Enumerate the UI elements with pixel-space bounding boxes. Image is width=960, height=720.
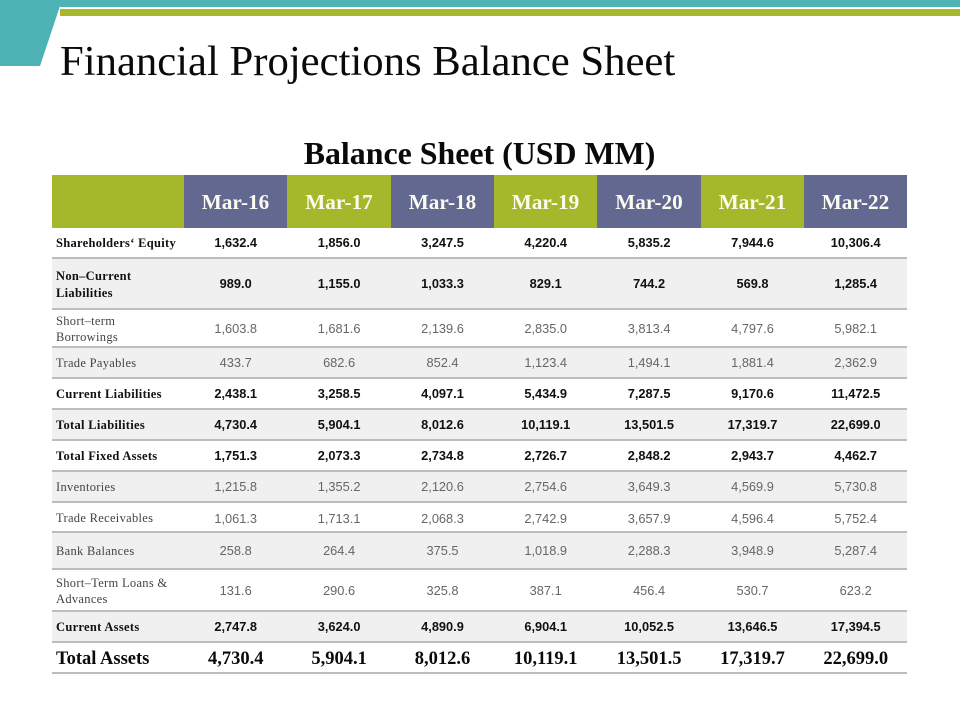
row: Shareholders' Equity: 4,220.4 <box>524 235 567 250</box>
row: Shareholders' Equity: 1,632.4 <box>214 235 257 250</box>
table header row: Mar-18 <box>409 190 476 214</box>
row: Short-Term Loans & Advances: 387.1 <box>530 582 562 598</box>
row: Short-Term Loans & Advances: Short–Term Loans & <box>56 576 167 590</box>
row: Short-Term Loans & Advances: 530.7 <box>736 582 768 598</box>
row: Trade Receivables: 1,061.3 <box>214 510 257 526</box>
row: Short-term Borrowings: Short–term <box>56 314 115 328</box>
row: Total Assets: Total Assets <box>56 649 149 669</box>
row: Total Liabilities: 13,501.5 <box>624 417 674 432</box>
row: Total Assets <box>52 643 907 674</box>
row: Non-Current Liabilities: 829.1 <box>530 276 562 291</box>
row: Total Assets: 4,730.4 <box>208 649 263 669</box>
row: Trade Receivables: 5,752.4 <box>834 510 877 526</box>
row: Current Liabilities: 4,097.1 <box>421 386 464 401</box>
row: Short-term Borrowings: 3,813.4 <box>628 320 670 336</box>
row: Inventories: 5,730.8 <box>834 479 877 494</box>
row: Inventories: Inventories <box>56 480 116 494</box>
row: Bank Balances: 258.8 <box>220 543 252 558</box>
row: Total Liabilities: Total Liabilities <box>56 418 145 432</box>
row: Short-term Borrowings: 1,603.8 <box>214 320 257 336</box>
row: Bank Balances <box>52 533 907 570</box>
row: Current Assets: 4,890.9 <box>421 619 464 634</box>
table header row: Mar-20 <box>615 190 683 214</box>
row: Bank Balances: 264.4 <box>323 543 355 558</box>
row: Short-Term Loans & Advances: 456.4 <box>633 582 665 598</box>
row: Shareholders' Equity: 1,856.0 <box>318 235 360 250</box>
row: Non-Current Liabilities: Non–Current <box>56 269 131 283</box>
table header row: Mar-19 <box>512 190 579 214</box>
corner teal shape <box>0 0 60 66</box>
row: Trade Payables: 1,881.4 <box>731 355 774 370</box>
row: Trade Receivables <box>52 503 907 533</box>
row: Bank Balances: Bank Balances <box>56 544 135 558</box>
table header row <box>52 175 907 228</box>
row: Bank Balances: 1,018.9 <box>524 543 567 558</box>
row: Total Assets: 8,012.6 <box>415 649 470 669</box>
row: Current Assets: 10,052.5 <box>624 619 674 634</box>
row: Total Fixed Assets: 2,943.7 <box>731 448 774 463</box>
row: Short-term Borrowings <box>52 310 907 348</box>
row: Current Liabilities: 2,438.1 <box>214 386 257 401</box>
row: Inventories <box>52 472 907 503</box>
row: Trade Payables: 1,494.1 <box>628 355 670 370</box>
row: Short-term Borrowings: 2,139.6 <box>421 320 464 336</box>
row: Total Liabilities: 4,730.4 <box>214 417 257 432</box>
row: Trade Payables: 852.4 <box>426 355 458 370</box>
row: Short-term Borrowings: Borrowings <box>56 330 118 344</box>
row: Total Assets: 13,501.5 <box>617 649 681 669</box>
row: Trade Receivables: 3,657.9 <box>628 510 670 526</box>
row: Total Fixed Assets: 2,848.2 <box>628 448 670 463</box>
row: Short-term Borrowings: 5,982.1 <box>834 320 877 336</box>
row: Shareholders' Equity: 3,247.5 <box>421 235 464 250</box>
row: Shareholders' Equity: 10,306.4 <box>831 235 881 250</box>
title: Financial Projections Balance Sheet <box>60 38 675 85</box>
row: Total Liabilities <box>52 410 907 441</box>
row: Total Fixed Assets: 2,073.3 <box>318 448 360 463</box>
row: Total Fixed Assets: 2,734.8 <box>421 448 464 463</box>
row: Shareholders' Equity: 7,944.6 <box>731 235 774 250</box>
row: Total Liabilities: 5,904.1 <box>318 417 360 432</box>
row: Trade Payables: 433.7 <box>220 355 252 370</box>
row: Total Assets: 10,119.1 <box>514 649 578 669</box>
row: Total Fixed Assets <box>52 441 907 472</box>
row: Total Liabilities: 10,119.1 <box>521 417 570 432</box>
row: Shareholders' Equity: 5,835.2 <box>628 235 670 250</box>
row: Bank Balances: 375.5 <box>426 543 458 558</box>
row: Total Liabilities: 22,699.0 <box>831 417 881 432</box>
row: Trade Payables: 682.6 <box>323 355 355 370</box>
row: Total Liabilities: 17,319.7 <box>728 417 777 432</box>
top green bar <box>60 9 960 16</box>
row: Total Assets: 5,904.1 <box>311 649 367 669</box>
top teal bar <box>60 0 960 7</box>
row: Shareholders' Equity <box>52 228 907 259</box>
row: Inventories: 2,120.6 <box>421 479 464 494</box>
table header row: Mar-21 <box>719 190 786 214</box>
row: Short-Term Loans & Advances: Advances <box>56 592 108 606</box>
row: Trade Receivables: 1,713.1 <box>318 510 360 526</box>
row: Total Liabilities: 8,012.6 <box>421 417 464 432</box>
row: Inventories: 3,649.3 <box>628 479 670 494</box>
row: Short-Term Loans & Advances: 325.8 <box>426 582 458 598</box>
row: Total Fixed Assets: 4,462.7 <box>834 448 877 463</box>
row: Non-Current Liabilities: Liabilities <box>56 286 113 300</box>
row: Current Assets: 6,904.1 <box>524 619 567 634</box>
row: Current Assets: 13,646.5 <box>728 619 777 634</box>
row: Short-term Borrowings: 4,797.6 <box>731 320 774 336</box>
row: Shareholders' Equity: Shareholders‘ Equity <box>56 236 176 250</box>
row: Current Assets: Current Assets <box>56 620 139 634</box>
row: Short-Term Loans & Advances <box>52 570 907 612</box>
row: Current Assets: 2,747.8 <box>214 619 257 634</box>
row: Current Assets: 3,624.0 <box>318 619 360 634</box>
row: Bank Balances: 5,287.4 <box>834 543 877 558</box>
row: Current Liabilities: Current Liabilities <box>56 387 162 401</box>
row: Current Liabilities <box>52 379 907 410</box>
row: Current Assets <box>52 612 907 643</box>
row: Trade Payables: Trade Payables <box>56 356 136 370</box>
row: Current Liabilities: 11,472.5 <box>831 386 880 401</box>
row: Short-Term Loans & Advances: 131.6 <box>220 582 252 598</box>
row: Current Liabilities: 3,258.5 <box>318 386 360 401</box>
row: Current Assets: 17,394.5 <box>831 619 881 634</box>
row: Trade Receivables: Trade Receivables <box>56 511 153 525</box>
row: Inventories: 1,355.2 <box>318 479 360 494</box>
row: Short-Term Loans & Advances: 623.2 <box>840 582 872 598</box>
row: Trade Receivables: 4,596.4 <box>731 510 774 526</box>
row: Trade Receivables: 2,742.9 <box>524 510 567 526</box>
row: Total Assets: 22,699.0 <box>823 649 888 669</box>
table heading: Balance Sheet (USD MM) <box>304 136 655 171</box>
table header row: Mar-22 <box>822 190 889 214</box>
row: Short-Term Loans & Advances: 290.6 <box>323 582 355 598</box>
row: Bank Balances: 3,948.9 <box>731 543 774 558</box>
row: Inventories: 1,215.8 <box>214 479 257 494</box>
row: Trade Payables <box>52 348 907 379</box>
row: Bank Balances: 2,288.3 <box>628 543 670 558</box>
row: Inventories: 2,754.6 <box>524 479 567 494</box>
row: Non-Current Liabilities: 989.0 <box>220 276 252 291</box>
table header row: Mar-17 <box>305 190 373 214</box>
table header row: Mar-16 <box>202 190 269 214</box>
row: Short-term Borrowings: 2,835.0 <box>524 320 567 336</box>
row: Total Fixed Assets: Total Fixed Assets <box>56 449 157 463</box>
row: Total Fixed Assets: 1,751.3 <box>214 448 257 463</box>
row: Inventories: 4,569.9 <box>731 479 774 494</box>
row: Current Liabilities: 7,287.5 <box>628 386 670 401</box>
row: Non-Current Liabilities: 569.8 <box>736 276 768 291</box>
row: Total Fixed Assets: 2,726.7 <box>524 448 567 463</box>
row: Trade Payables: 1,123.4 <box>524 355 567 370</box>
row: Non-Current Liabilities: 1,285.4 <box>834 276 877 291</box>
row: Total Assets: 17,319.7 <box>720 649 785 669</box>
row: Short-term Borrowings: 1,681.6 <box>318 320 360 336</box>
row: Current Liabilities: 9,170.6 <box>731 386 774 401</box>
row: Trade Payables: 2,362.9 <box>834 355 877 370</box>
row: Current Liabilities: 5,434.9 <box>524 386 567 401</box>
row: Non-Current Liabilities <box>52 259 907 310</box>
row: Non-Current Liabilities: 1,155.0 <box>318 276 360 291</box>
row: Non-Current Liabilities: 744.2 <box>633 276 665 291</box>
row: Trade Receivables: 2,068.3 <box>421 510 464 526</box>
row: Non-Current Liabilities: 1,033.3 <box>421 276 464 291</box>
